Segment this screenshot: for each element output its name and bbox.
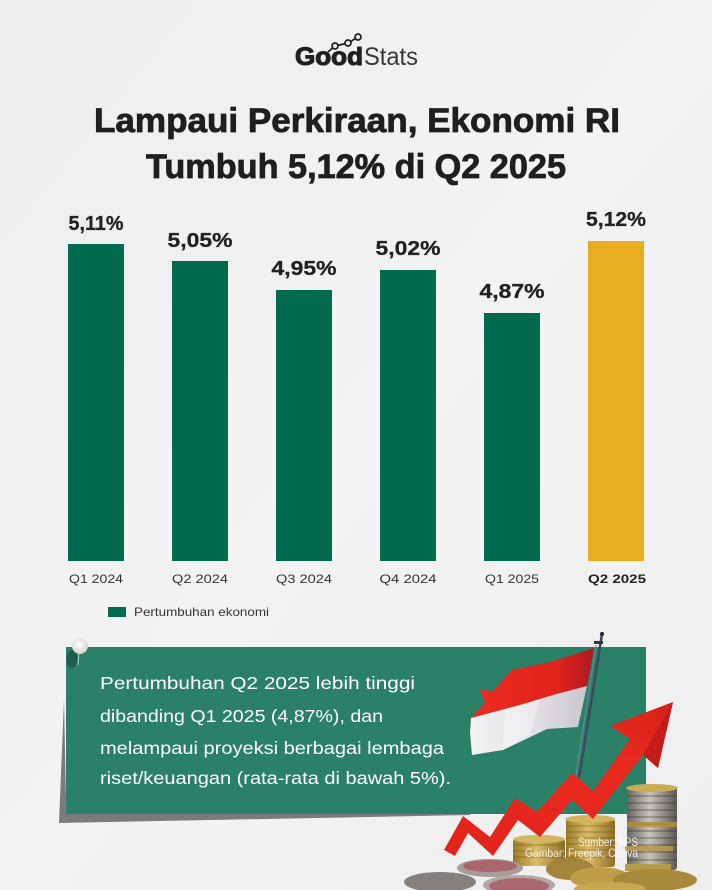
logo: GoodStats: Good xyxy=(295,43,363,71)
callout text: dibanding Q1 2025 (4,87%), dan xyxy=(100,706,383,726)
bar: Q2 2024: Q2 2024 xyxy=(172,572,228,586)
bar: Q3 2024: Q3 2024 xyxy=(276,572,332,586)
title: Tumbuh 5,12% di Q2 2025 xyxy=(146,148,566,186)
callout text: Pertumbuhan Q2 2025 lebih tinggi xyxy=(100,673,415,693)
bar: Q3 2024: 4,95% xyxy=(272,258,337,280)
title xyxy=(94,102,620,186)
bar: Q1 2024 xyxy=(68,213,124,586)
bar chart xyxy=(68,209,646,586)
bar: Q4 2024: Q4 2024 xyxy=(380,572,437,586)
bar: Q2 2025 highlighted: Q2 2025 xyxy=(588,572,646,586)
bar: Q2 2024: 5,05% xyxy=(168,230,233,252)
bar: Q1 2024: Q1 2024 xyxy=(69,572,123,586)
right silver stack xyxy=(625,784,678,871)
bar: Q2 2025 highlighted: 5,12% xyxy=(586,209,646,231)
logo: GoodStats: Stats xyxy=(364,43,418,71)
illustration: red rising arrow xyxy=(444,702,673,856)
title: Lampaui Perkiraan, Ekonomi RI xyxy=(94,102,620,140)
loose coins xyxy=(404,858,697,890)
bar: Q1 2025: 4,87% xyxy=(480,281,545,303)
illustration: coin stacks xyxy=(404,784,697,890)
bar: Q1 2025 xyxy=(480,281,545,586)
panel background xyxy=(66,647,646,814)
bar: Q4 2024 xyxy=(376,238,441,586)
bar: Q1 2024: 5,11% xyxy=(68,213,124,235)
legend: Pertumbuhan ekonomi xyxy=(134,605,269,619)
logo: GoodStats xyxy=(295,34,418,71)
source note: Gambar: Freepik, Canva xyxy=(525,846,638,860)
left gold stack xyxy=(513,835,565,866)
bar: Q2 2025 highlighted xyxy=(586,209,646,586)
callout text xyxy=(100,673,451,788)
bar: Q4 2024: 5,02% xyxy=(376,238,441,260)
panel shadow xyxy=(59,700,470,823)
callout text: melampaui proyeksi berbagai lembaga xyxy=(100,738,444,758)
illustration: Indonesian flag xyxy=(470,632,604,778)
source note xyxy=(525,835,638,860)
icon: push pin xyxy=(66,638,88,668)
source note: Sumber: BPS xyxy=(578,835,638,849)
bar: Q2 2024 xyxy=(168,230,233,586)
middle gold stack xyxy=(565,815,615,867)
bar: Q3 2024 xyxy=(272,258,337,586)
callout text: riset/keuangan (rata-rata di bawah 5%). xyxy=(100,768,451,788)
panel: callout xyxy=(59,638,646,823)
bar: Q1 2025: Q1 2025 xyxy=(485,572,539,586)
